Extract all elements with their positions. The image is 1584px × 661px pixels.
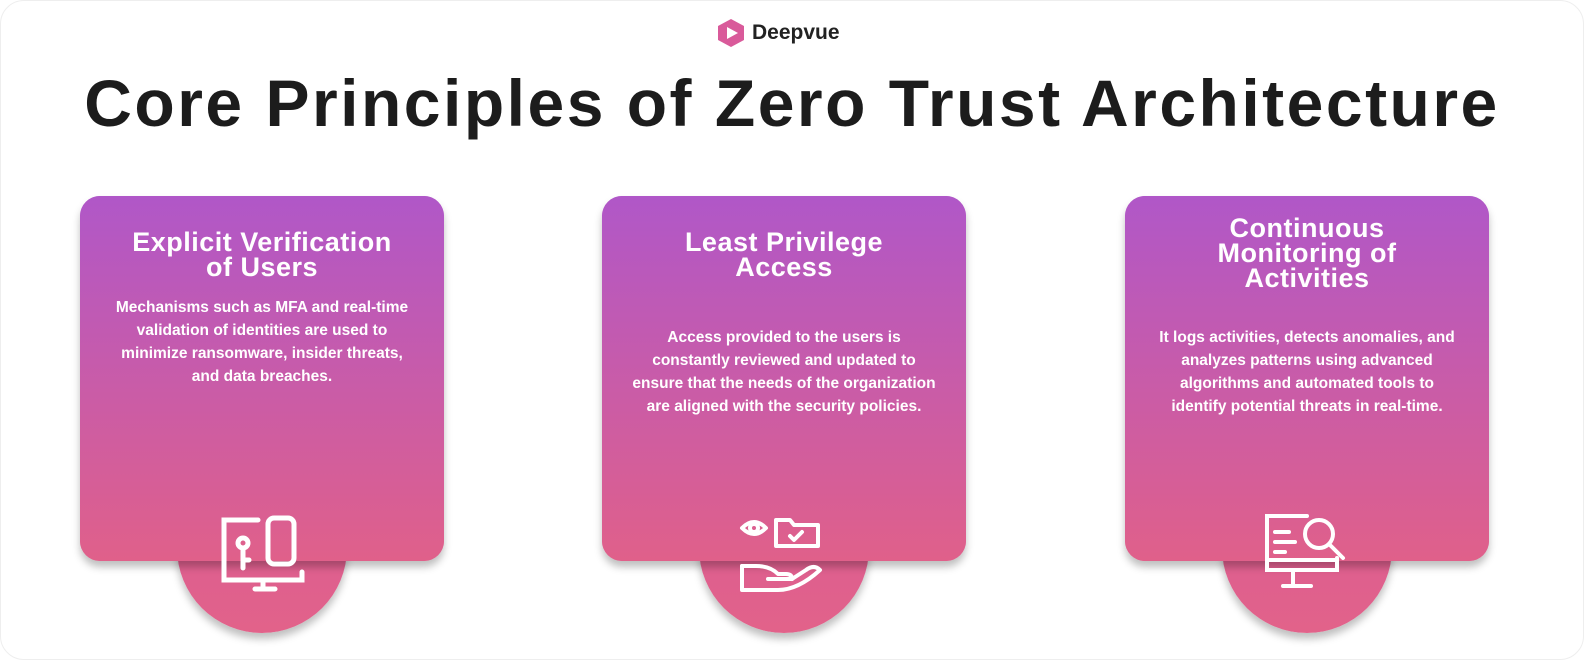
panel: continuous monitoring (1121, 196, 1493, 643)
heading: Activities (1244, 263, 1370, 293)
logo: Deepvue (752, 21, 840, 44)
text block: It logs activities, detects anomalies, and analyzes patterns using advanced algorithms and automated tools to identify potential threats in real-time. (1159, 329, 1455, 415)
heading (685, 227, 883, 282)
heading (1218, 213, 1396, 293)
logo (718, 19, 840, 47)
heading: of Users (206, 252, 318, 282)
heading: Monitoring of (1218, 238, 1396, 268)
heading (132, 227, 392, 282)
title: Core Principles of Zero Trust Architecture (84, 66, 1500, 140)
icon: monitor magnifier (1265, 514, 1346, 588)
heading: Explicit Verification (132, 227, 392, 257)
panel: least privilege (598, 196, 970, 643)
heading: Continuous (1230, 213, 1384, 243)
heading: Least Privilege (685, 227, 883, 257)
heading: Access (735, 252, 833, 282)
icon: monitor key (222, 516, 304, 592)
panel: explicit verification (76, 196, 448, 643)
text block: Access provided to the users is constantly reviewed and updated to ensure that the needs of the organization are aligned with the security policies. (632, 329, 936, 415)
icon: hand eye folder (740, 518, 822, 592)
text block: Mechanisms such as MFA and real-time validation of identities are used to minimize ransomware, insider threats, and data breaches. (116, 299, 408, 385)
